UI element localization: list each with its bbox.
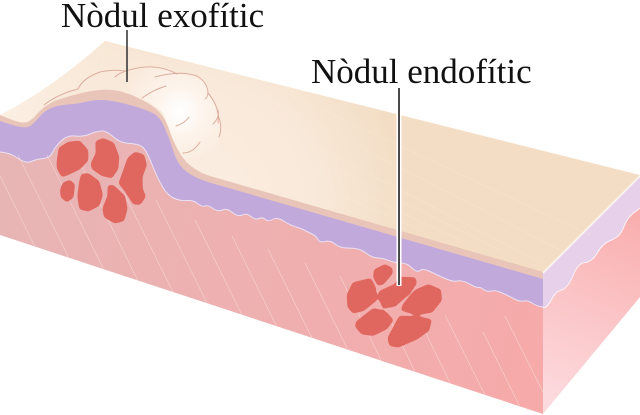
right side face [543,175,640,414]
leader line: exophytic [126,30,128,82]
leader line: endophytic [396,88,402,286]
stratum band under the surface [0,70,543,279]
tumour cluster: exophytic nodule [57,138,147,224]
exophytic nodule [43,66,221,163]
skin surface: top face [0,41,640,272]
epidermis: purple layer [0,70,543,310]
dermis: front face [0,131,543,414]
tumour cluster: endophytic nodule [347,264,442,348]
right top edge highlight [543,176,640,273]
surface hair lines [55,44,590,262]
label: endophytic nodule: Nòdul endofític [311,52,532,91]
